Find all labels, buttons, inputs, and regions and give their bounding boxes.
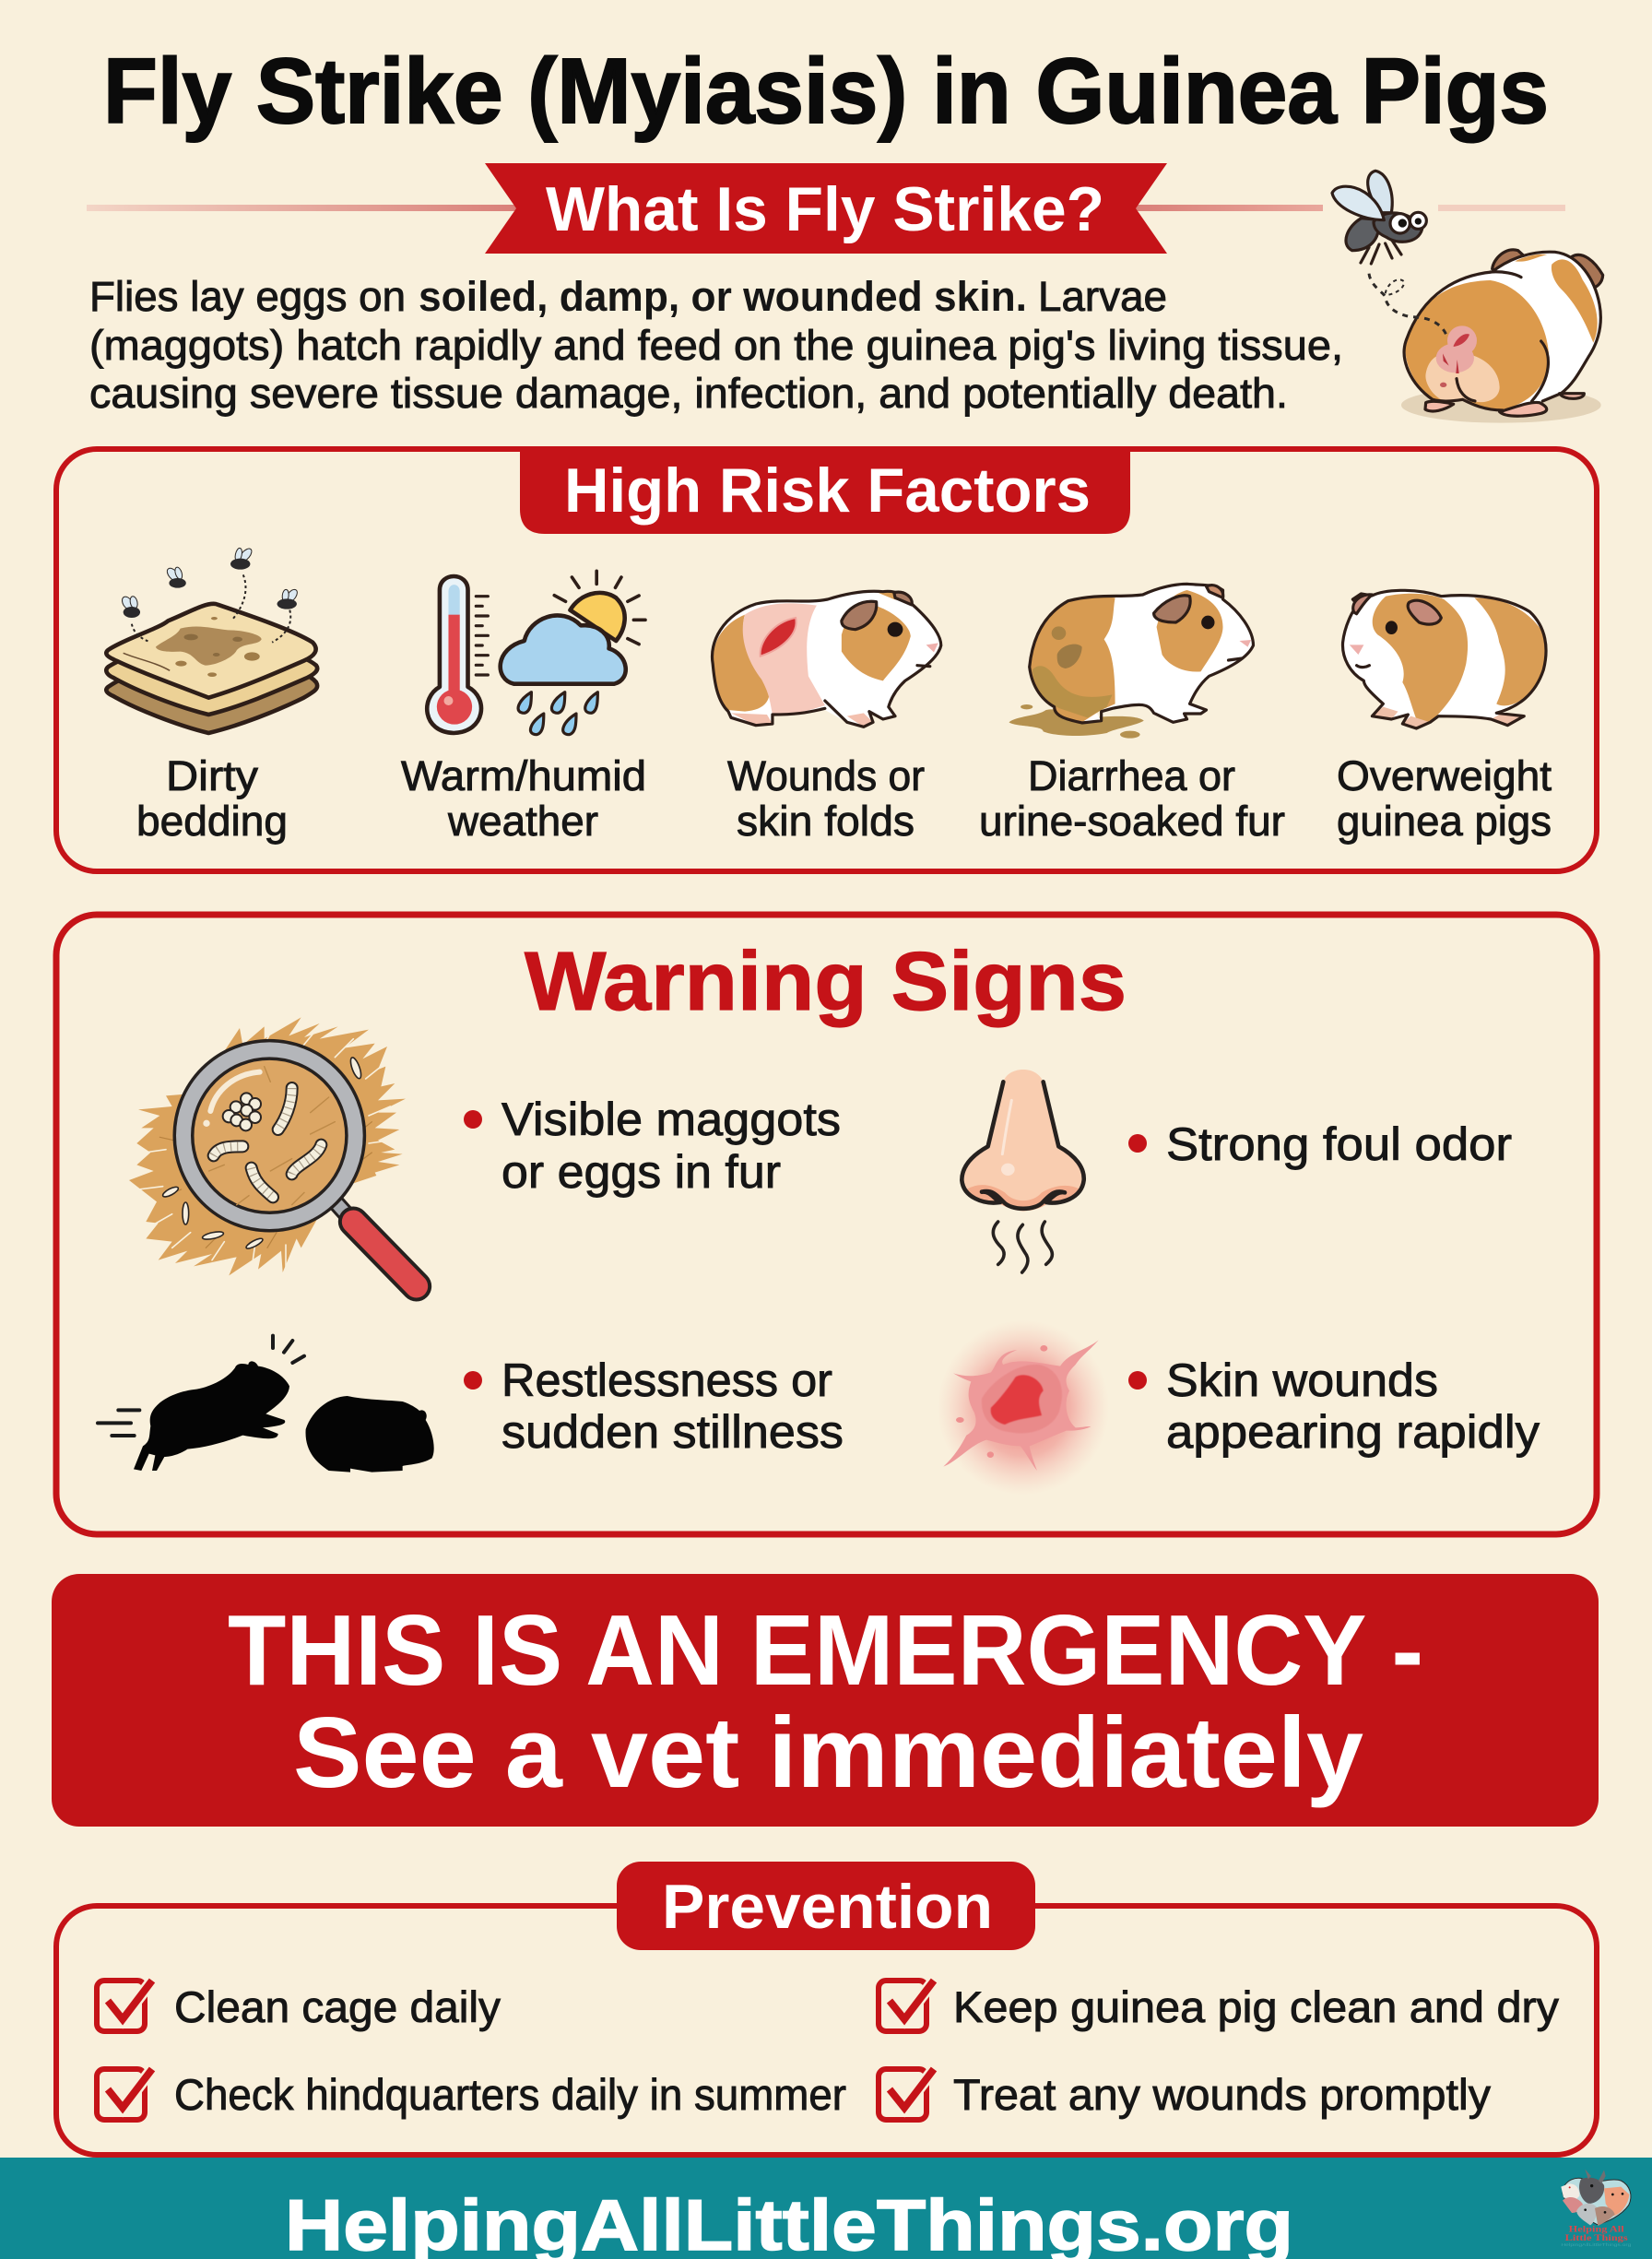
checklist item: clean cage daily: Clean cage daily (174, 1982, 502, 2031)
checklist item: check hindquarters: Check hindquarters daily in summer (174, 2070, 846, 2119)
emergency banner: See a vet immediately (293, 1697, 1363, 1809)
footer logo: HelpingAllLittleThings.org (1561, 2242, 1632, 2247)
risk factor labels: bedding (136, 798, 288, 845)
risk factor labels: Overweight (1337, 752, 1552, 799)
emergency banner (52, 1574, 1599, 1827)
icon: skin wound (938, 1320, 1109, 1496)
risk factor labels: guinea pigs (1337, 798, 1552, 845)
warning signs bullet list (464, 1094, 1540, 1458)
risk factor labels: Wounds or (727, 752, 925, 799)
warning signs bullet list: Skin wounds (1166, 1354, 1438, 1406)
footer logo: Little Things (1565, 2234, 1628, 2243)
definition text (89, 273, 1343, 417)
icon: guinea pig with soiled fur and puddle (1009, 584, 1253, 739)
checklist item: keep clean and dry: Keep guinea pig clean and dry (953, 1982, 1560, 2031)
section: what is fly strike (87, 163, 1603, 423)
risk factor labels: weather (447, 798, 598, 845)
icon: guinea pig with wound (713, 591, 941, 727)
warning signs bullet list: appearing rapidly (1166, 1406, 1540, 1458)
emergency banner: THIS IS AN EMERGENCY - (228, 1594, 1423, 1707)
panel: prevention (56, 1862, 1597, 2155)
icon: fly (1332, 171, 1426, 264)
definition text: (maggots) hatch rapidly and feed on the guinea pig's living tissue, (89, 322, 1343, 369)
risk factor labels (136, 752, 1552, 845)
icon: dirty bedding with flies (106, 547, 317, 733)
title: Fly Strike (Myiasis) in Guinea Pigs (103, 40, 1549, 143)
icon: overweight guinea pig (1343, 590, 1546, 728)
warning signs bullet list: Strong foul odor (1166, 1118, 1512, 1170)
definition text: soiled, damp, or wounded skin. (419, 273, 1027, 320)
risk factor labels: Dirty (166, 752, 259, 799)
icon: magnifying glass over maggots in fur (129, 1017, 417, 1286)
risk factor labels: Diarrhea or (1028, 752, 1235, 799)
warning signs bullet list: or eggs in fur (502, 1146, 781, 1198)
warning signs bullet list: Visible maggots (502, 1094, 841, 1145)
warning signs heading: Warning Signs (525, 936, 1127, 1028)
risk factor labels: skin folds (737, 798, 914, 845)
icon: guinea pig silhouettes (98, 1336, 434, 1472)
ribbon heading: What Is Fly Strike? (546, 174, 1104, 244)
footer logo: Helping All (1569, 2226, 1624, 2235)
prevention heading tab (617, 1862, 1035, 1950)
icon: guinea pig rear with flight path (1369, 250, 1603, 423)
panel: high risk factors (56, 447, 1597, 871)
checklist item: treat wounds: Treat any wounds promptly (953, 2070, 1492, 2119)
footer logo (1561, 2170, 1632, 2247)
icon: thermometer (427, 576, 488, 733)
warning signs bullet list: Restlessness or (502, 1354, 832, 1406)
risk factor labels: Warm/humid (401, 752, 646, 799)
icon: nose with smell lines (962, 1070, 1084, 1272)
definition text: Flies lay eggs on (89, 273, 406, 320)
prevention heading tab: Prevention (662, 1872, 993, 1942)
definition text: Larvae (1038, 273, 1167, 320)
heading tab: High Risk Factors (564, 455, 1091, 526)
ribbon heading (485, 163, 1167, 254)
warning signs bullet list: sudden stillness (502, 1406, 844, 1458)
footer bar (0, 2158, 1652, 2259)
definition text: causing severe tissue damage, infection, and potentially death. (89, 370, 1288, 417)
panel: warning signs (56, 915, 1597, 1534)
risk factor labels: urine-soaked fur (979, 798, 1285, 845)
icon: sun, cloud and rain (501, 571, 645, 735)
